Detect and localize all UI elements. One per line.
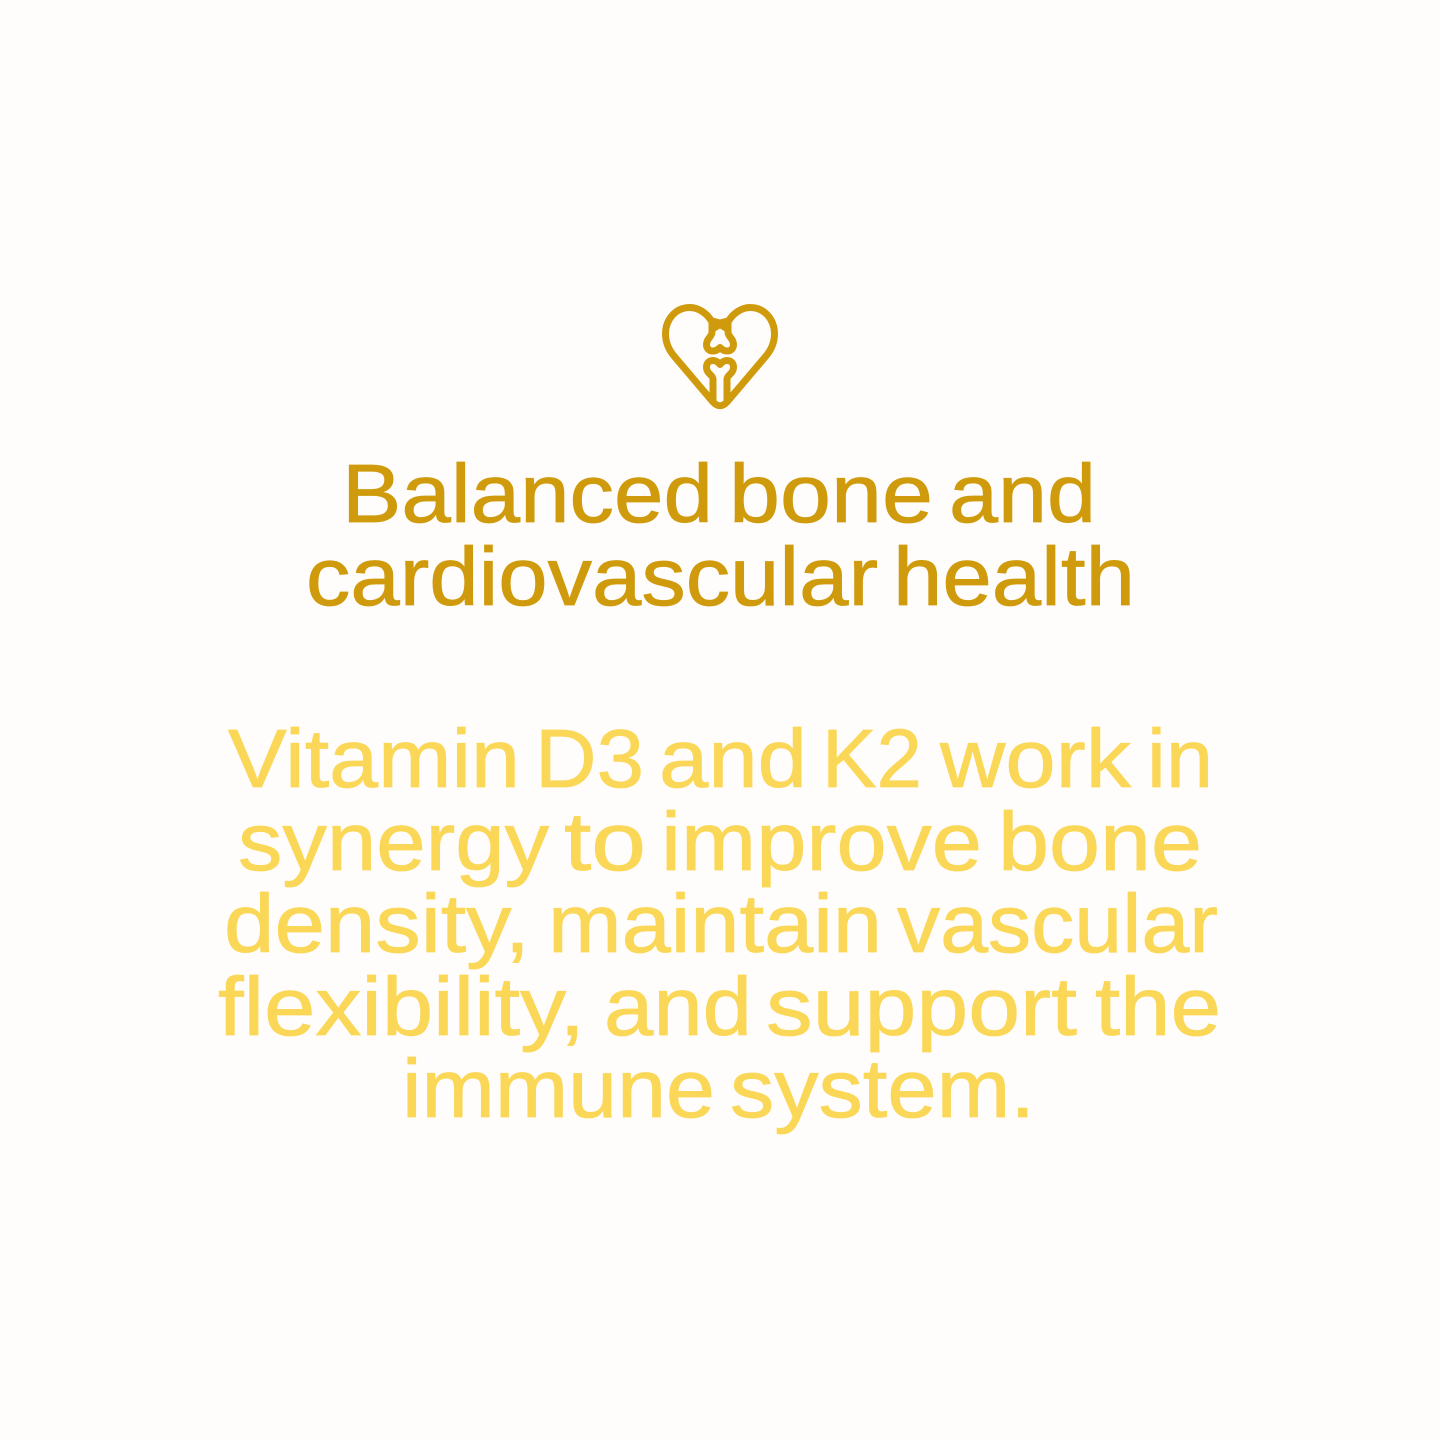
- body text: K2: [822, 712, 922, 805]
- heading: Balanced: [342, 447, 713, 540]
- body text: flexibility,: [218, 960, 585, 1053]
- body text: work: [939, 712, 1132, 805]
- body text: vascular: [897, 877, 1218, 970]
- body text: and: [659, 712, 807, 805]
- body text: improve: [661, 795, 982, 888]
- body text: [218, 712, 1221, 1135]
- body text: immune: [402, 1042, 715, 1135]
- body text: D3: [535, 712, 644, 805]
- heading: cardiovascular: [306, 530, 878, 623]
- body text: support: [766, 960, 1077, 1053]
- body text: the: [1095, 960, 1221, 1053]
- body text: synergy: [238, 795, 550, 888]
- heading: bone: [729, 447, 933, 540]
- body text: in: [1147, 712, 1213, 805]
- body text: system.: [730, 1042, 1035, 1135]
- body text: Vitamin: [228, 712, 520, 805]
- heading: and: [949, 447, 1096, 540]
- body text: to: [564, 795, 646, 888]
- body text: bone: [998, 795, 1202, 888]
- heading: health: [893, 530, 1135, 623]
- icon: heart with bone joint: [666, 308, 774, 406]
- body text: density,: [224, 877, 530, 970]
- heading: [306, 447, 1135, 623]
- body text: and: [604, 960, 752, 1053]
- body text: maintain: [548, 877, 882, 970]
